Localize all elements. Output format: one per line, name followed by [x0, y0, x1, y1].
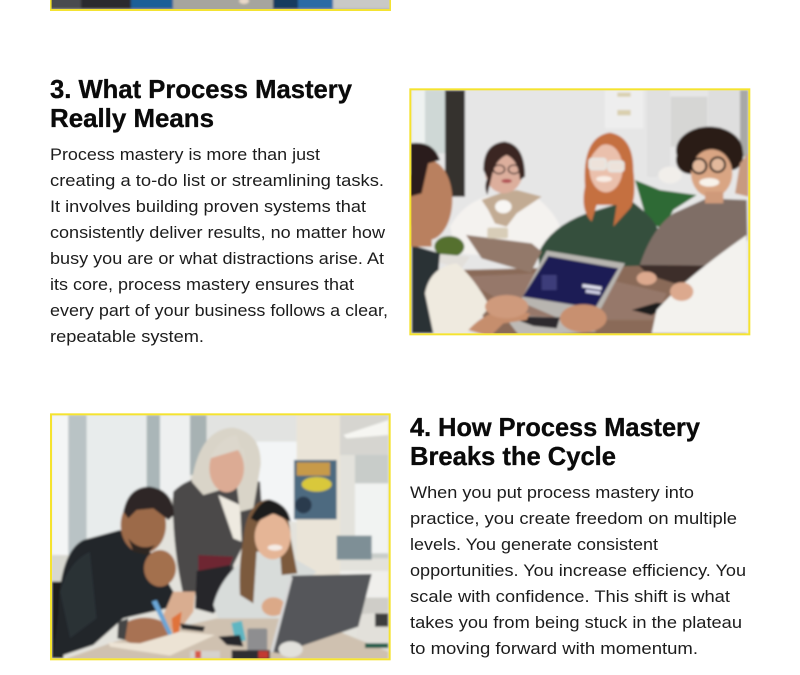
table [457, 265, 747, 335]
table [67, 618, 388, 660]
section 4 body text: to moving forward with momentum. [410, 639, 698, 658]
woman right curly hair [638, 198, 747, 273]
small plant and pot [434, 236, 464, 257]
photo: three colleagues at a laptop [48, 413, 392, 660]
silver laptop with blue screen [520, 251, 625, 322]
man [53, 530, 173, 658]
photo strip: bottom of previous section image [45, 0, 395, 11]
section 3 body text: creating a to-do list or streamlining tasks. [50, 171, 384, 190]
section 3 heading: Really Means [50, 103, 214, 133]
section 4 heading: Breaks the Cycle [410, 441, 616, 471]
section 4 body text: takes you from being stuck in the plateau [410, 613, 742, 632]
monitor on the right [337, 536, 372, 560]
section 3 body text: its core, process mastery ensures that [50, 275, 354, 294]
woman centre [538, 200, 658, 273]
phone on table [632, 303, 670, 315]
section 4 heading: 4. How Process Mastery [410, 412, 701, 442]
laptop back brown [466, 235, 542, 273]
woman left back [450, 199, 560, 254]
older woman [173, 477, 262, 612]
section 4 body text: practice, you create freedom on multiple [410, 509, 737, 528]
section 3 heading [50, 74, 353, 133]
desks at right [340, 571, 388, 598]
section 4 body text: When you put process mastery into [410, 483, 694, 502]
section 3 body text: busy you are or what distractions arise. At [50, 249, 384, 268]
phone [180, 623, 205, 632]
pens and holder [231, 621, 246, 643]
tablet in right woman's hands [638, 265, 711, 284]
older woman arm [163, 592, 195, 632]
foreground person left [412, 245, 440, 333]
section 4 body text: scale with confidence. This shift is what [410, 587, 730, 606]
section 3 body text: repeatable system. [50, 327, 204, 346]
poster [294, 460, 337, 519]
young woman [213, 552, 317, 618]
section 3 body text [50, 145, 388, 346]
section 3 body text: every part of your business follows a clear, [50, 301, 388, 320]
section 4 body text [410, 483, 746, 658]
section 3 body text: consistently deliver results, no matter how [50, 223, 386, 242]
yellow frame [51, 414, 390, 659]
section 3 heading: 3. What Process Mastery [50, 74, 353, 104]
section 3 body text: Process mastery is more than just [50, 145, 320, 164]
foreground person right [652, 235, 748, 333]
section 3 body text: It involves building proven systems that [50, 197, 366, 216]
laptop [270, 574, 372, 653]
section 4 body text: opportunities. You increase efficiency. You [410, 561, 746, 580]
yellow frame [410, 89, 749, 334]
mug [487, 228, 508, 238]
section 4 body text: levels. You generate consistent [410, 535, 658, 554]
photo: team meeting around a table [404, 88, 750, 337]
notebook [108, 632, 215, 656]
left windowsill and chair [52, 556, 68, 582]
section 4 heading [410, 412, 701, 471]
plant behind [635, 180, 697, 230]
